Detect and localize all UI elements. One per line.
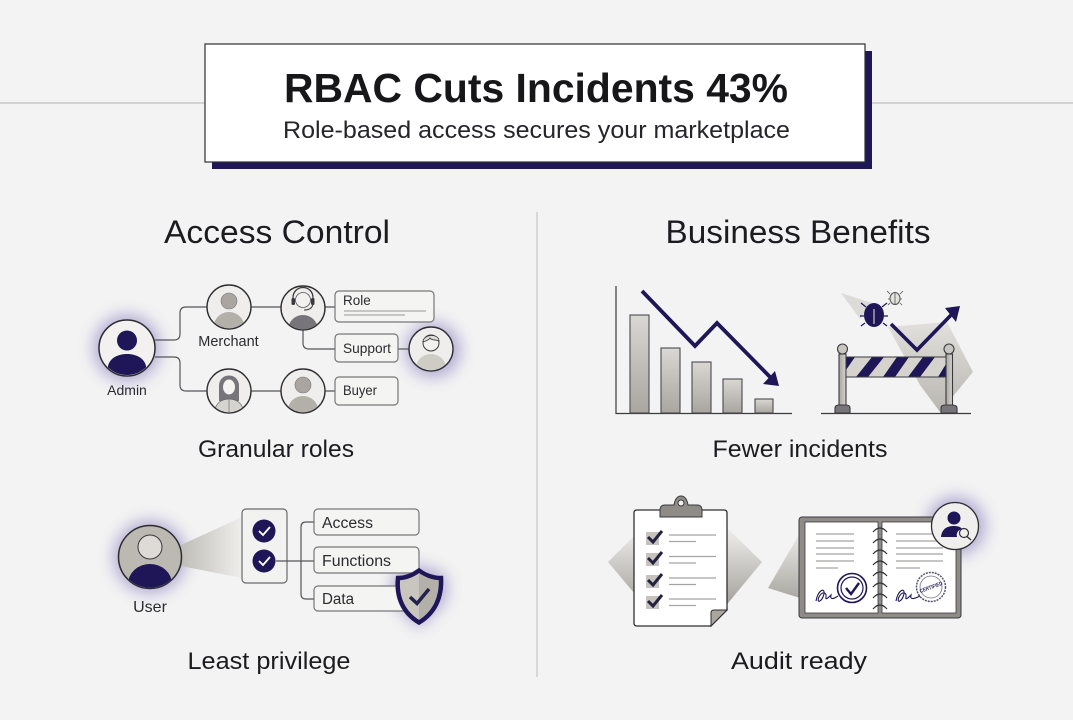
- label: granular roles: Granular roles: [198, 436, 354, 463]
- label: least privilege: Least privilege: [188, 648, 350, 675]
- signature left: [816, 590, 838, 601]
- panel: least privilege diagram: [114, 509, 446, 628]
- glow: [927, 497, 985, 555]
- label: fewer incidents: Fewer incidents: [712, 436, 888, 463]
- panel: barrier blocking bugs: [821, 291, 973, 414]
- ground: [821, 412, 971, 414]
- rising arrow: [891, 306, 960, 350]
- glows: [94, 315, 460, 381]
- label: audit ready: Audit ready: [731, 648, 867, 675]
- box: buyer: [335, 377, 398, 405]
- glows: [114, 521, 446, 628]
- icon: bug solid: [860, 303, 888, 327]
- node: buyer: [280, 368, 326, 414]
- barrier posts: [835, 344, 957, 413]
- box: access: [314, 509, 419, 535]
- grey shards: [841, 293, 872, 319]
- box: buyer: Buyer: [343, 383, 377, 398]
- checklist box: [242, 509, 287, 583]
- signature right: [896, 590, 920, 601]
- panel: bar chart with falling trend: [616, 286, 792, 414]
- stamp: certified: [916, 572, 946, 602]
- icon: bug outline: [887, 291, 903, 305]
- center divider: [536, 212, 538, 677]
- node: user: User: [133, 599, 168, 616]
- book cover: [799, 517, 961, 618]
- page: [634, 510, 727, 626]
- panel: audit book: [768, 497, 985, 618]
- node: merchant: Merchant: [198, 334, 259, 350]
- heading: business benefits: Business Benefits: [666, 214, 930, 250]
- clip: [660, 496, 702, 517]
- header rule: [0, 102, 1073, 104]
- box: data: Data: [322, 591, 354, 608]
- subtitle: Role-based access secures your marketplace: [283, 117, 790, 144]
- icon: shield: [398, 570, 441, 622]
- title panel: [205, 44, 872, 169]
- panel: granular roles diagram: [94, 285, 460, 424]
- page fold: [711, 610, 727, 626]
- box: functions: Functions: [322, 553, 391, 570]
- text lines: [816, 534, 943, 568]
- stamp: check: [838, 574, 866, 602]
- box: role: Role: [343, 293, 371, 308]
- axes: [616, 286, 792, 414]
- stamp: certified: CERTIFIED: [919, 581, 944, 595]
- connectors: [155, 307, 409, 391]
- box: role: [335, 291, 434, 322]
- wedge: [768, 533, 800, 598]
- node: admin: [99, 320, 155, 398]
- connectors: [276, 522, 314, 599]
- spiral binding: [873, 528, 887, 609]
- box: support: Support: [343, 340, 391, 356]
- panel: clipboard: [608, 496, 762, 626]
- pages: [805, 522, 878, 613]
- node: merchant: [198, 285, 259, 350]
- box: functions: [314, 547, 419, 573]
- node: support agent: [280, 285, 326, 331]
- box: access: Access: [322, 515, 373, 532]
- box: data: [314, 586, 419, 611]
- heading: access control: Access Control: [164, 214, 390, 250]
- beam: [181, 517, 242, 578]
- node: support user: [408, 326, 454, 372]
- icon: auditor badge: [932, 502, 978, 550]
- backing diamond: [608, 525, 762, 608]
- box: support: [335, 334, 398, 362]
- bars: [630, 315, 773, 413]
- striped band: [846, 357, 946, 377]
- node: admin: Admin: [107, 382, 147, 398]
- title: RBAC Cuts Incidents 43%: [284, 65, 788, 111]
- checklist: [646, 531, 716, 609]
- falling arrow: [642, 291, 779, 386]
- node: woman: [207, 369, 251, 414]
- node: user: [118, 526, 182, 616]
